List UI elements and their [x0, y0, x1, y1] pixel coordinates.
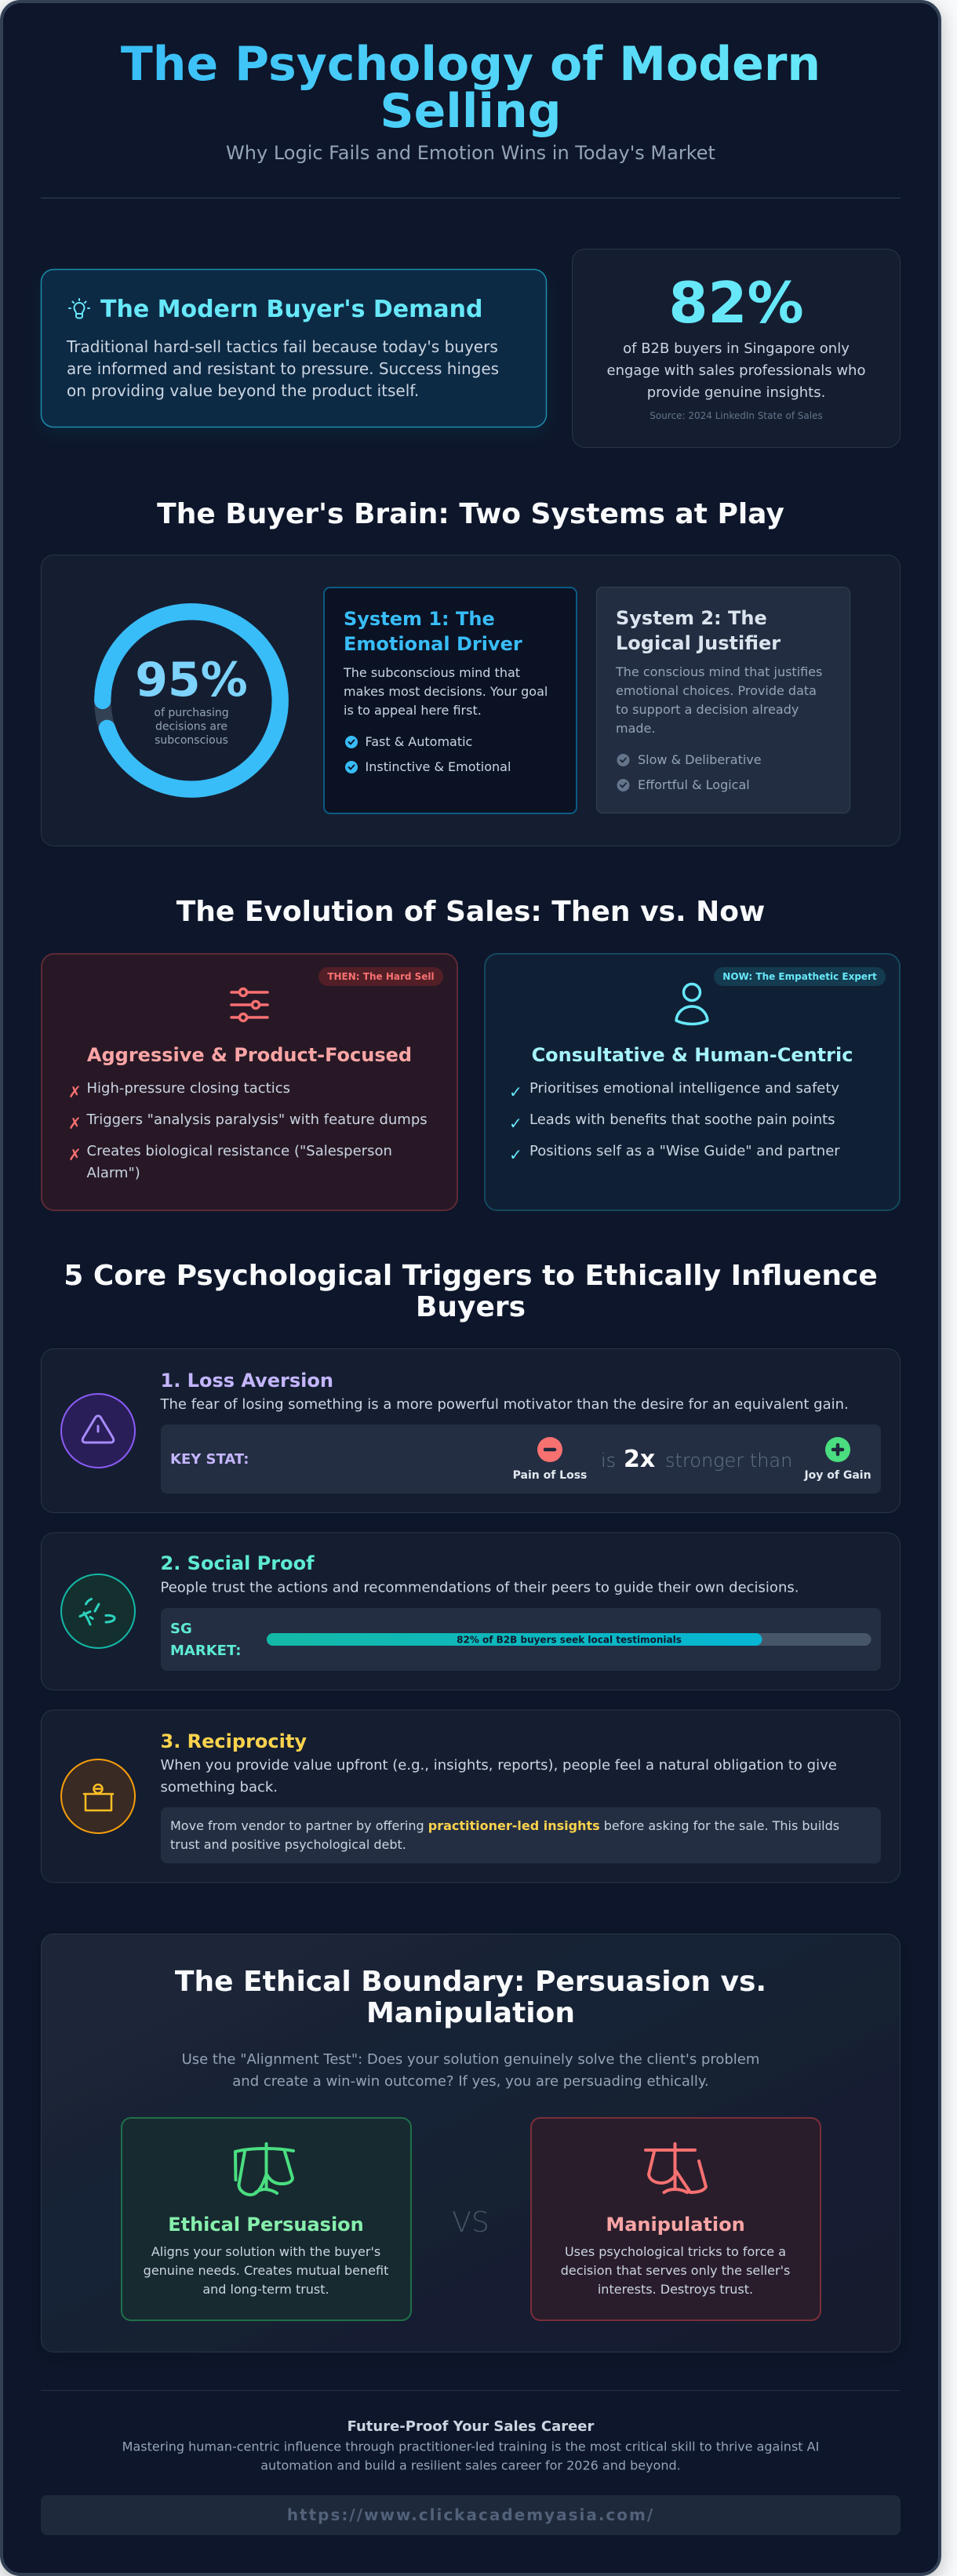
donut chart: 95% — [103, 612, 280, 789]
now list: Prioritises emotional intelligence and safety — [529, 1080, 839, 1097]
heading: The Modern Buyer's Demand — [100, 296, 483, 323]
trigger 3 description: When you provide value upfront (e.g., insights, reports), people feel a natural obligation to give — [160, 1757, 837, 1774]
heading: core triggers: Buyers — [416, 1291, 526, 1323]
icon: light bulb — [69, 299, 89, 318]
ethical heading: The Ethical Boundary: Persuasion vs. — [175, 1966, 766, 1998]
panel: then, the hard sell — [42, 954, 457, 1210]
then list: Creates biological resistance ("Salesperson — [86, 1143, 392, 1159]
now heading: Consultative & Human-Centric — [532, 1044, 853, 1066]
then heading: Aggressive & Product-Focused — [87, 1044, 412, 1066]
panel: ethical boundary — [41, 1934, 901, 2352]
ethical description: Aligns your solution with the buyer's — [151, 2244, 380, 2259]
vs label: VS — [452, 2207, 489, 2239]
badge: now — [714, 967, 886, 986]
now list: ✓ — [509, 1145, 522, 1164]
ethical title: Ethical Persuasion — [168, 2214, 364, 2236]
stat description: engage with sales professionals who — [607, 362, 865, 379]
key stat box: 2x — [624, 1446, 655, 1473]
system 1 title: Emotional Driver — [344, 633, 522, 655]
ethical description: genuine needs. Creates mutual benefit — [144, 2263, 388, 2278]
system 1 title: System 1: The — [344, 608, 495, 630]
subtitle: Why Logic Fails and Emotion Wins in Today's Market — [226, 142, 715, 164]
body text: are informed and resistant to pressure. Success hinges — [67, 359, 499, 378]
title: The Psychology of Modern — [121, 37, 821, 92]
reciprocity callout: Move from vendor to partner by offering practitioner-led insights before asking for the sale. This builds — [170, 1818, 839, 1833]
url bar — [41, 2495, 901, 2535]
system 2 list: Slow & Deliberative — [638, 752, 762, 767]
trigger 2 description: People trust the actions and recommendations of their peers to guide their own decisions. — [160, 1580, 799, 1595]
footer heading: Future-Proof Your Sales Career — [348, 2418, 595, 2435]
stat description: provide genuine insights. — [647, 384, 825, 401]
now list: Leads with benefits that soothe pain points — [529, 1112, 835, 1128]
then list: ✗ — [68, 1145, 82, 1164]
system 1 description: is to appeal here first. — [344, 703, 482, 718]
progress bar: 82% of B2B buyers seek local testimonials — [457, 1635, 682, 1646]
badge: now: NOW: The Empathetic Expert — [722, 971, 877, 982]
system 2 list: Effortful & Logical — [638, 777, 750, 792]
trigger 1 description: The fear of losing something is a more powerful motivator than the desire for an equivalent gain. — [160, 1396, 849, 1413]
icon: person — [676, 984, 708, 1024]
source: Source: 2024 LinkedIn State of Sales — [650, 410, 823, 421]
donut caption: of purchasing — [154, 707, 229, 719]
market stat box — [161, 1608, 881, 1671]
alignment test text: and create a win-win outcome? If yes, you are persuading ethically. — [232, 2073, 709, 2090]
badge: then — [318, 967, 443, 986]
system 1 list: Fast & Automatic — [366, 734, 472, 749]
title: Selling — [380, 84, 562, 139]
system 2 description: made. — [616, 721, 655, 736]
manipulation description: Uses psychological tricks to force a — [565, 2244, 786, 2259]
icon: plus — [825, 1437, 850, 1462]
stat description: of B2B buyers in Singapore only — [623, 340, 850, 357]
manipulation description: interests. Destroys trust. — [598, 2282, 753, 2297]
system 2 title: Logical Justifier — [616, 632, 781, 654]
ethical heading: Manipulation — [366, 1997, 575, 2029]
now list: ✓ — [509, 1114, 522, 1133]
system 2 description: emotional choices. Provide data — [616, 683, 817, 698]
then list: Triggers "analysis paralysis" with feature dumps — [86, 1112, 428, 1128]
panel: 82% stat — [573, 249, 901, 447]
trigger 1 title: 1. Loss Aversion — [160, 1370, 333, 1392]
alignment test text: Use the "Alignment Test": Does your solution genuinely solve the client's problem — [182, 2051, 759, 2068]
then list: High-pressure closing tactics — [86, 1080, 290, 1097]
icon: warning — [61, 1394, 135, 1468]
footer text: Mastering human-centric influence through practitioner-led training is the most critical skill to thrive against AI — [122, 2440, 819, 2454]
header — [121, 37, 821, 164]
badge: then: THEN: The Hard Sell — [327, 971, 435, 982]
key stat box: KEY STAT: — [170, 1451, 249, 1468]
system 2 description: to support a decision already — [616, 702, 799, 717]
panel: the modern buyer's demand — [41, 270, 546, 427]
reciprocity callout — [161, 1807, 881, 1864]
heading: core triggers: 5 Core Psychological Triggers to Ethically Influence — [64, 1260, 878, 1292]
ethical description: and long-term trust. — [202, 2282, 329, 2297]
panel: trigger 2, social proof — [41, 1533, 901, 1690]
then list: ✗ — [68, 1082, 82, 1101]
card: system 1 — [324, 588, 577, 813]
key stat box: Joy of Gain — [803, 1469, 871, 1482]
system 1 list — [345, 734, 511, 774]
icon: social — [61, 1574, 135, 1648]
donut caption: decisions are — [155, 720, 227, 733]
icon: minus — [537, 1437, 562, 1462]
manipulation description: decision that serves only the seller's — [561, 2263, 790, 2278]
system 1 list: Instinctive & Emotional — [366, 759, 511, 774]
body text: on providing value beyond the product itself. — [67, 381, 419, 400]
system 1 description: makes most decisions. Your goal — [344, 684, 548, 699]
system 2 title: System 2: The — [616, 607, 767, 629]
body text: Traditional hard-sell tactics fail because today's buyers — [67, 337, 498, 356]
icon: balanced scale — [235, 2144, 293, 2195]
trigger 3 description: something back. — [160, 1779, 278, 1796]
icon: gift — [61, 1759, 135, 1833]
heading: buyer's brain: The Buyer's Brain: Two Systems at Play — [157, 498, 784, 530]
progress bar — [267, 1633, 871, 1646]
panel: trigger 1, loss aversion — [41, 1349, 901, 1512]
market stat box: MARKET: — [170, 1643, 241, 1659]
url bar: https://www.clickacademyasia.com/ — [287, 2505, 654, 2524]
panel: two systems — [41, 555, 901, 846]
then list — [68, 1080, 428, 1181]
panel: trigger 3, reciprocity — [41, 1710, 901, 1883]
key stat box: Pain of Loss — [513, 1469, 587, 1482]
system 2 list — [617, 752, 762, 792]
trigger 2 title: 2. Social Proof — [160, 1552, 315, 1574]
trigger 3 title: 3. Reciprocity — [160, 1730, 307, 1752]
icon: sliders — [231, 988, 267, 1021]
then list: ✗ — [68, 1114, 82, 1133]
card: ethical persuasion — [122, 2118, 411, 2320]
now list — [509, 1080, 840, 1164]
donut value: 95% — [135, 653, 248, 708]
key stat box: stronger than — [665, 1450, 792, 1472]
now list: Positions self as a "Wise Guide" and partner — [529, 1143, 840, 1159]
key stat box: is — [601, 1450, 616, 1472]
footer — [41, 2418, 901, 2535]
key stat box — [161, 1424, 881, 1494]
card: manipulation — [531, 2118, 821, 2320]
then list: Alarm") — [86, 1165, 140, 1181]
market stat box: SG — [170, 1621, 192, 1637]
card: system 2 — [596, 587, 850, 813]
panel: now, the empathetic expert — [485, 954, 900, 1210]
now list: ✓ — [509, 1082, 522, 1101]
footer text: automation and build a resilient sales career for 2026 and beyond. — [260, 2458, 681, 2472]
system 2 description: The conscious mind that justifies — [616, 664, 822, 679]
reciprocity callout: trust and positive psychological debt. — [170, 1837, 406, 1852]
system 1 description: The subconscious mind that — [344, 665, 520, 680]
icon: tilted scale — [646, 2144, 706, 2192]
heading: evolution of sales: The Evolution of Sales: Then vs. Now — [176, 896, 765, 928]
donut caption: subconscious — [155, 734, 228, 747]
manipulation title: Manipulation — [606, 2214, 745, 2236]
big number: 82% — [668, 270, 804, 336]
